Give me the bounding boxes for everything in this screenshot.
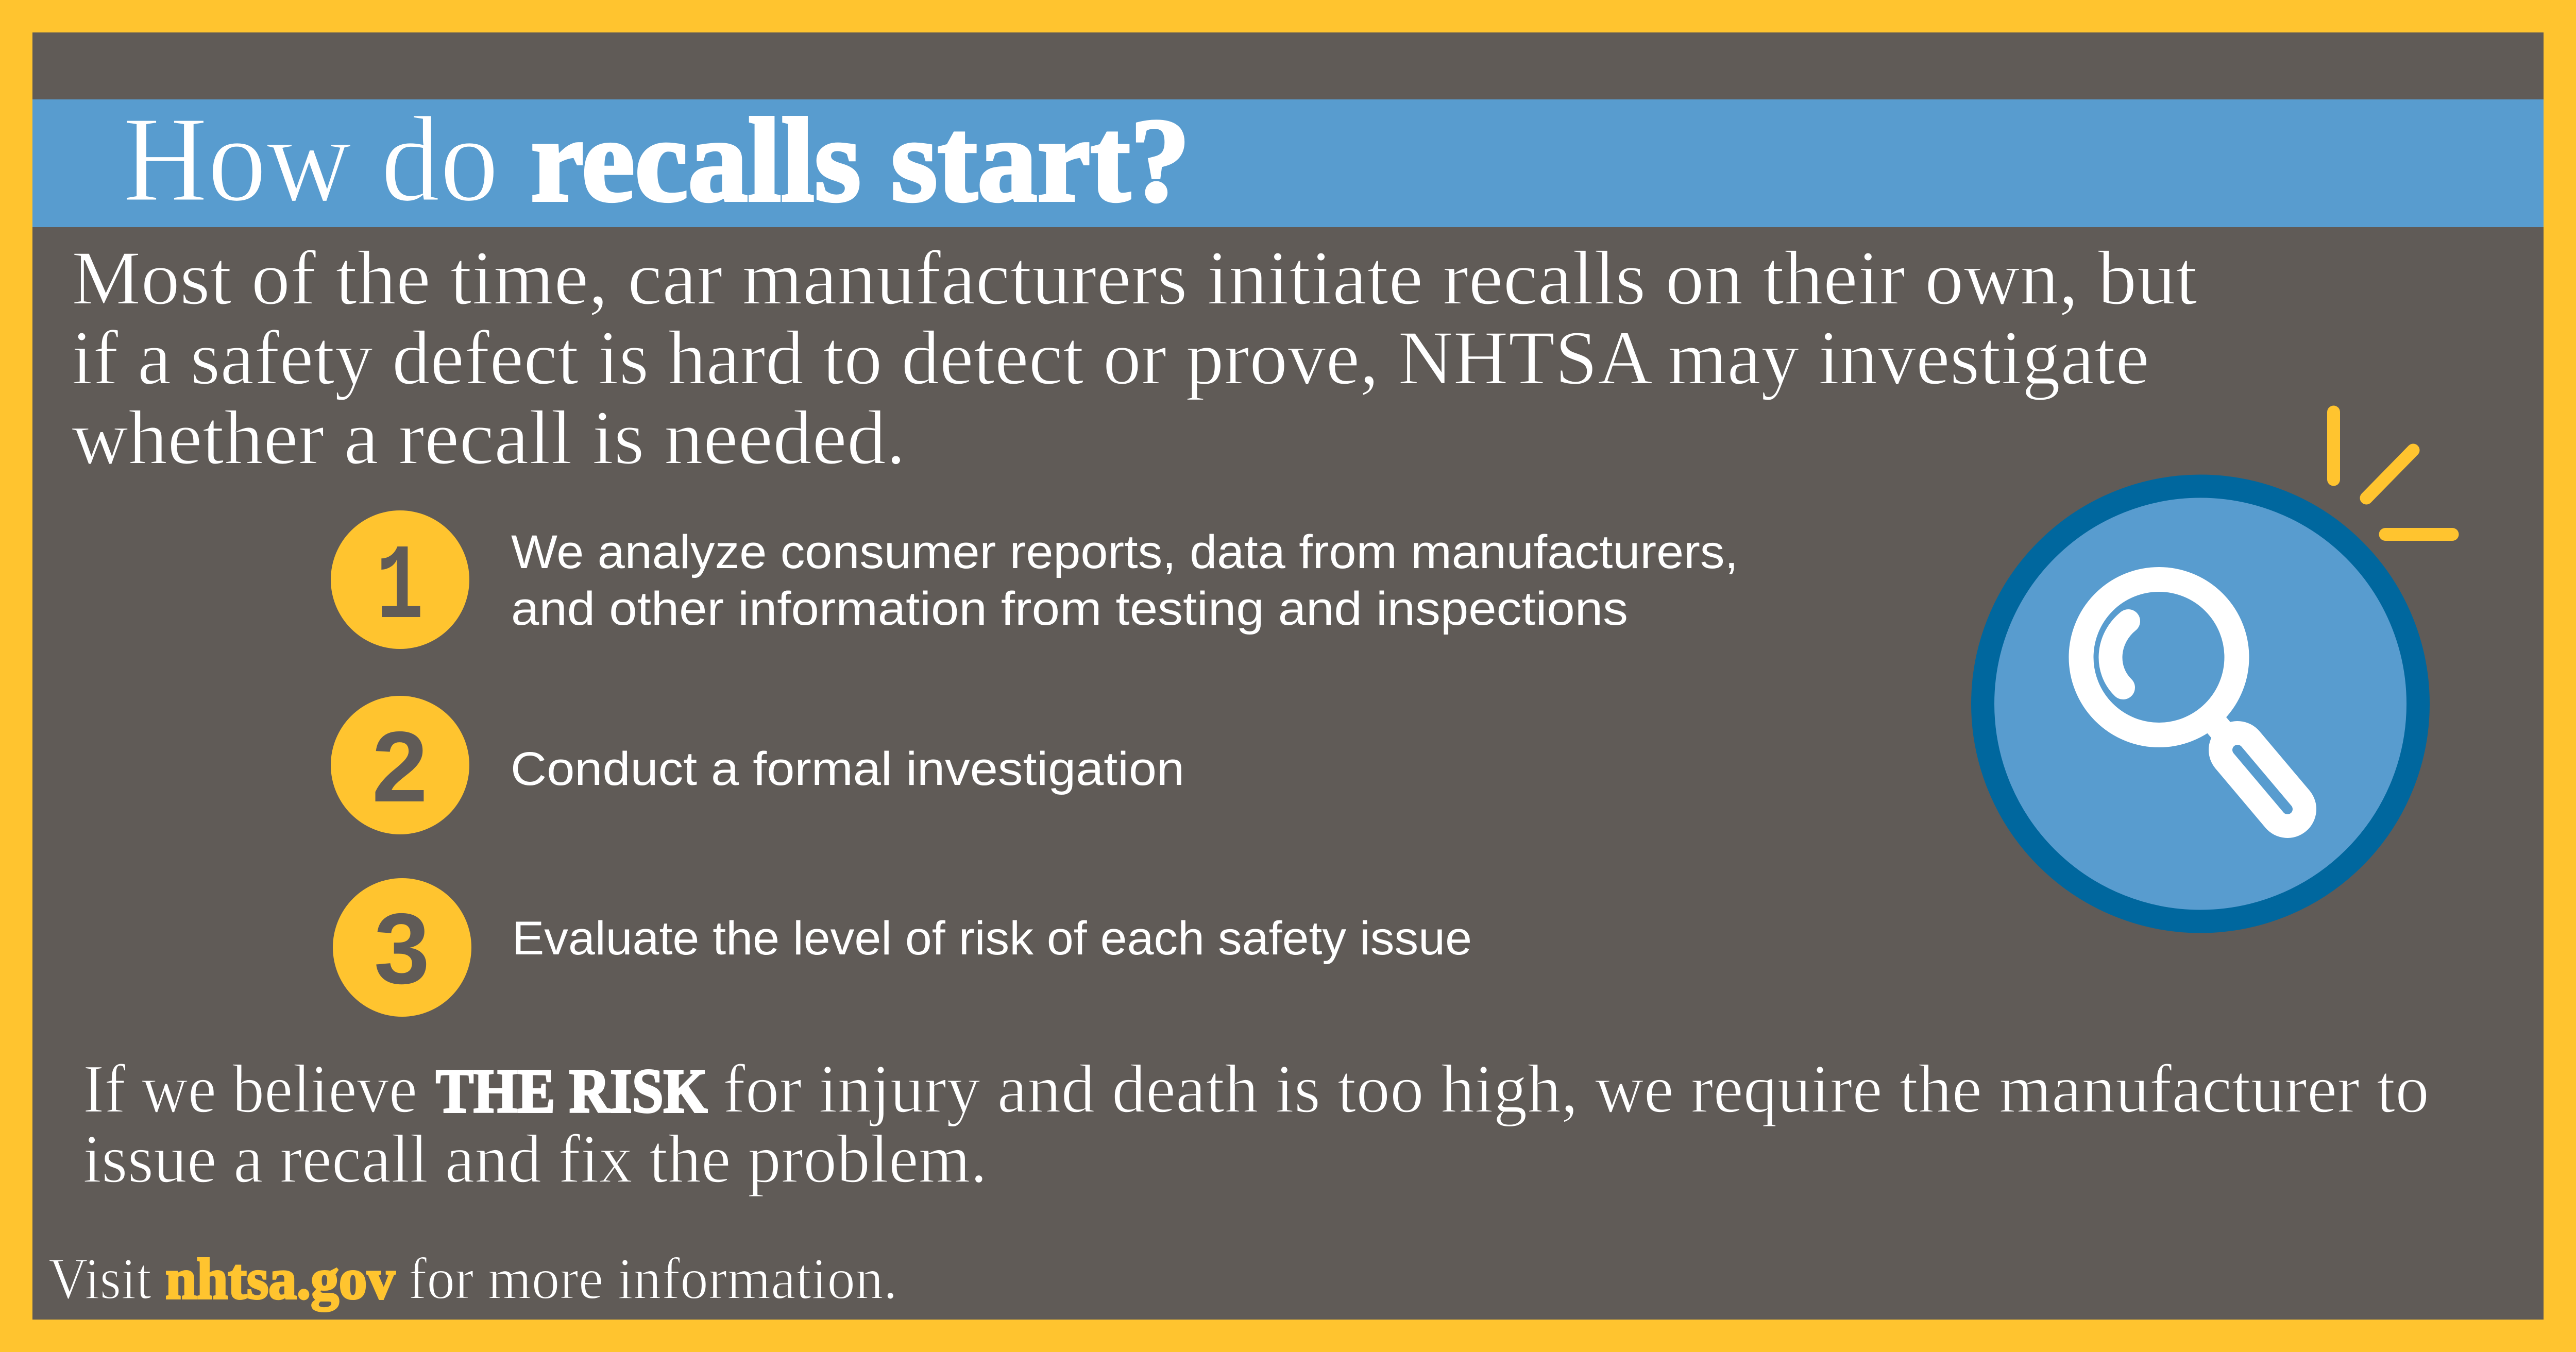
step 2 number badge [331,696,469,834]
step 3 number badge [333,878,471,1017]
step 1 number badge [331,510,469,649]
conclusion paragraph: THE RISK [436,1056,707,1126]
conclusion paragraph: If we believe [83,1051,417,1127]
step 1 text: We analyze consumer reports, data from manufacturers, [511,526,1738,578]
title text: recalls start? [531,94,1190,227]
step 1 [331,510,1738,649]
conclusion paragraph: for injury and death is too high, we require the manufacturer to [723,1051,2429,1127]
step 2 [331,696,1184,834]
footer link line: for more information. [408,1246,897,1311]
step 2 number badge: 2 [372,711,428,823]
icon background circle [1982,486,2418,921]
title banner [32,92,2544,227]
intro paragraph: whether a recall is needed. [72,395,906,481]
footer link line: Visit [48,1246,151,1311]
title text: How do [123,92,499,227]
title text [123,92,1190,227]
step 3 text: Evaluate the level of risk of each safety issue [512,912,1472,965]
conclusion paragraph: issue a recall and fix the problem. [83,1121,987,1197]
step 1 number badge: 1 [376,528,423,649]
step 2 text: Conduct a formal investigation [511,743,1184,795]
icon: magnifying glass [2081,579,2287,809]
conclusion paragraph [83,1051,2429,1197]
step 3 number badge: 3 [374,893,430,1005]
footer link line: nhtsa.gov [165,1247,395,1311]
step 1 text [511,526,1738,635]
icon: magnifying glass in circle [1982,412,2452,921]
intro paragraph [72,235,2197,481]
intro paragraph: Most of the time, car manufacturers initiate recalls on their own, but [72,235,2197,321]
icon: yellow sparkle rays [2334,412,2452,535]
step 3 [333,878,1472,1017]
intro paragraph: if a safety defect is hard to detect or prove, NHTSA may investigate [72,315,2149,401]
footer link line [48,1246,897,1311]
step 1 text: and other information from testing and inspections [511,583,1628,635]
